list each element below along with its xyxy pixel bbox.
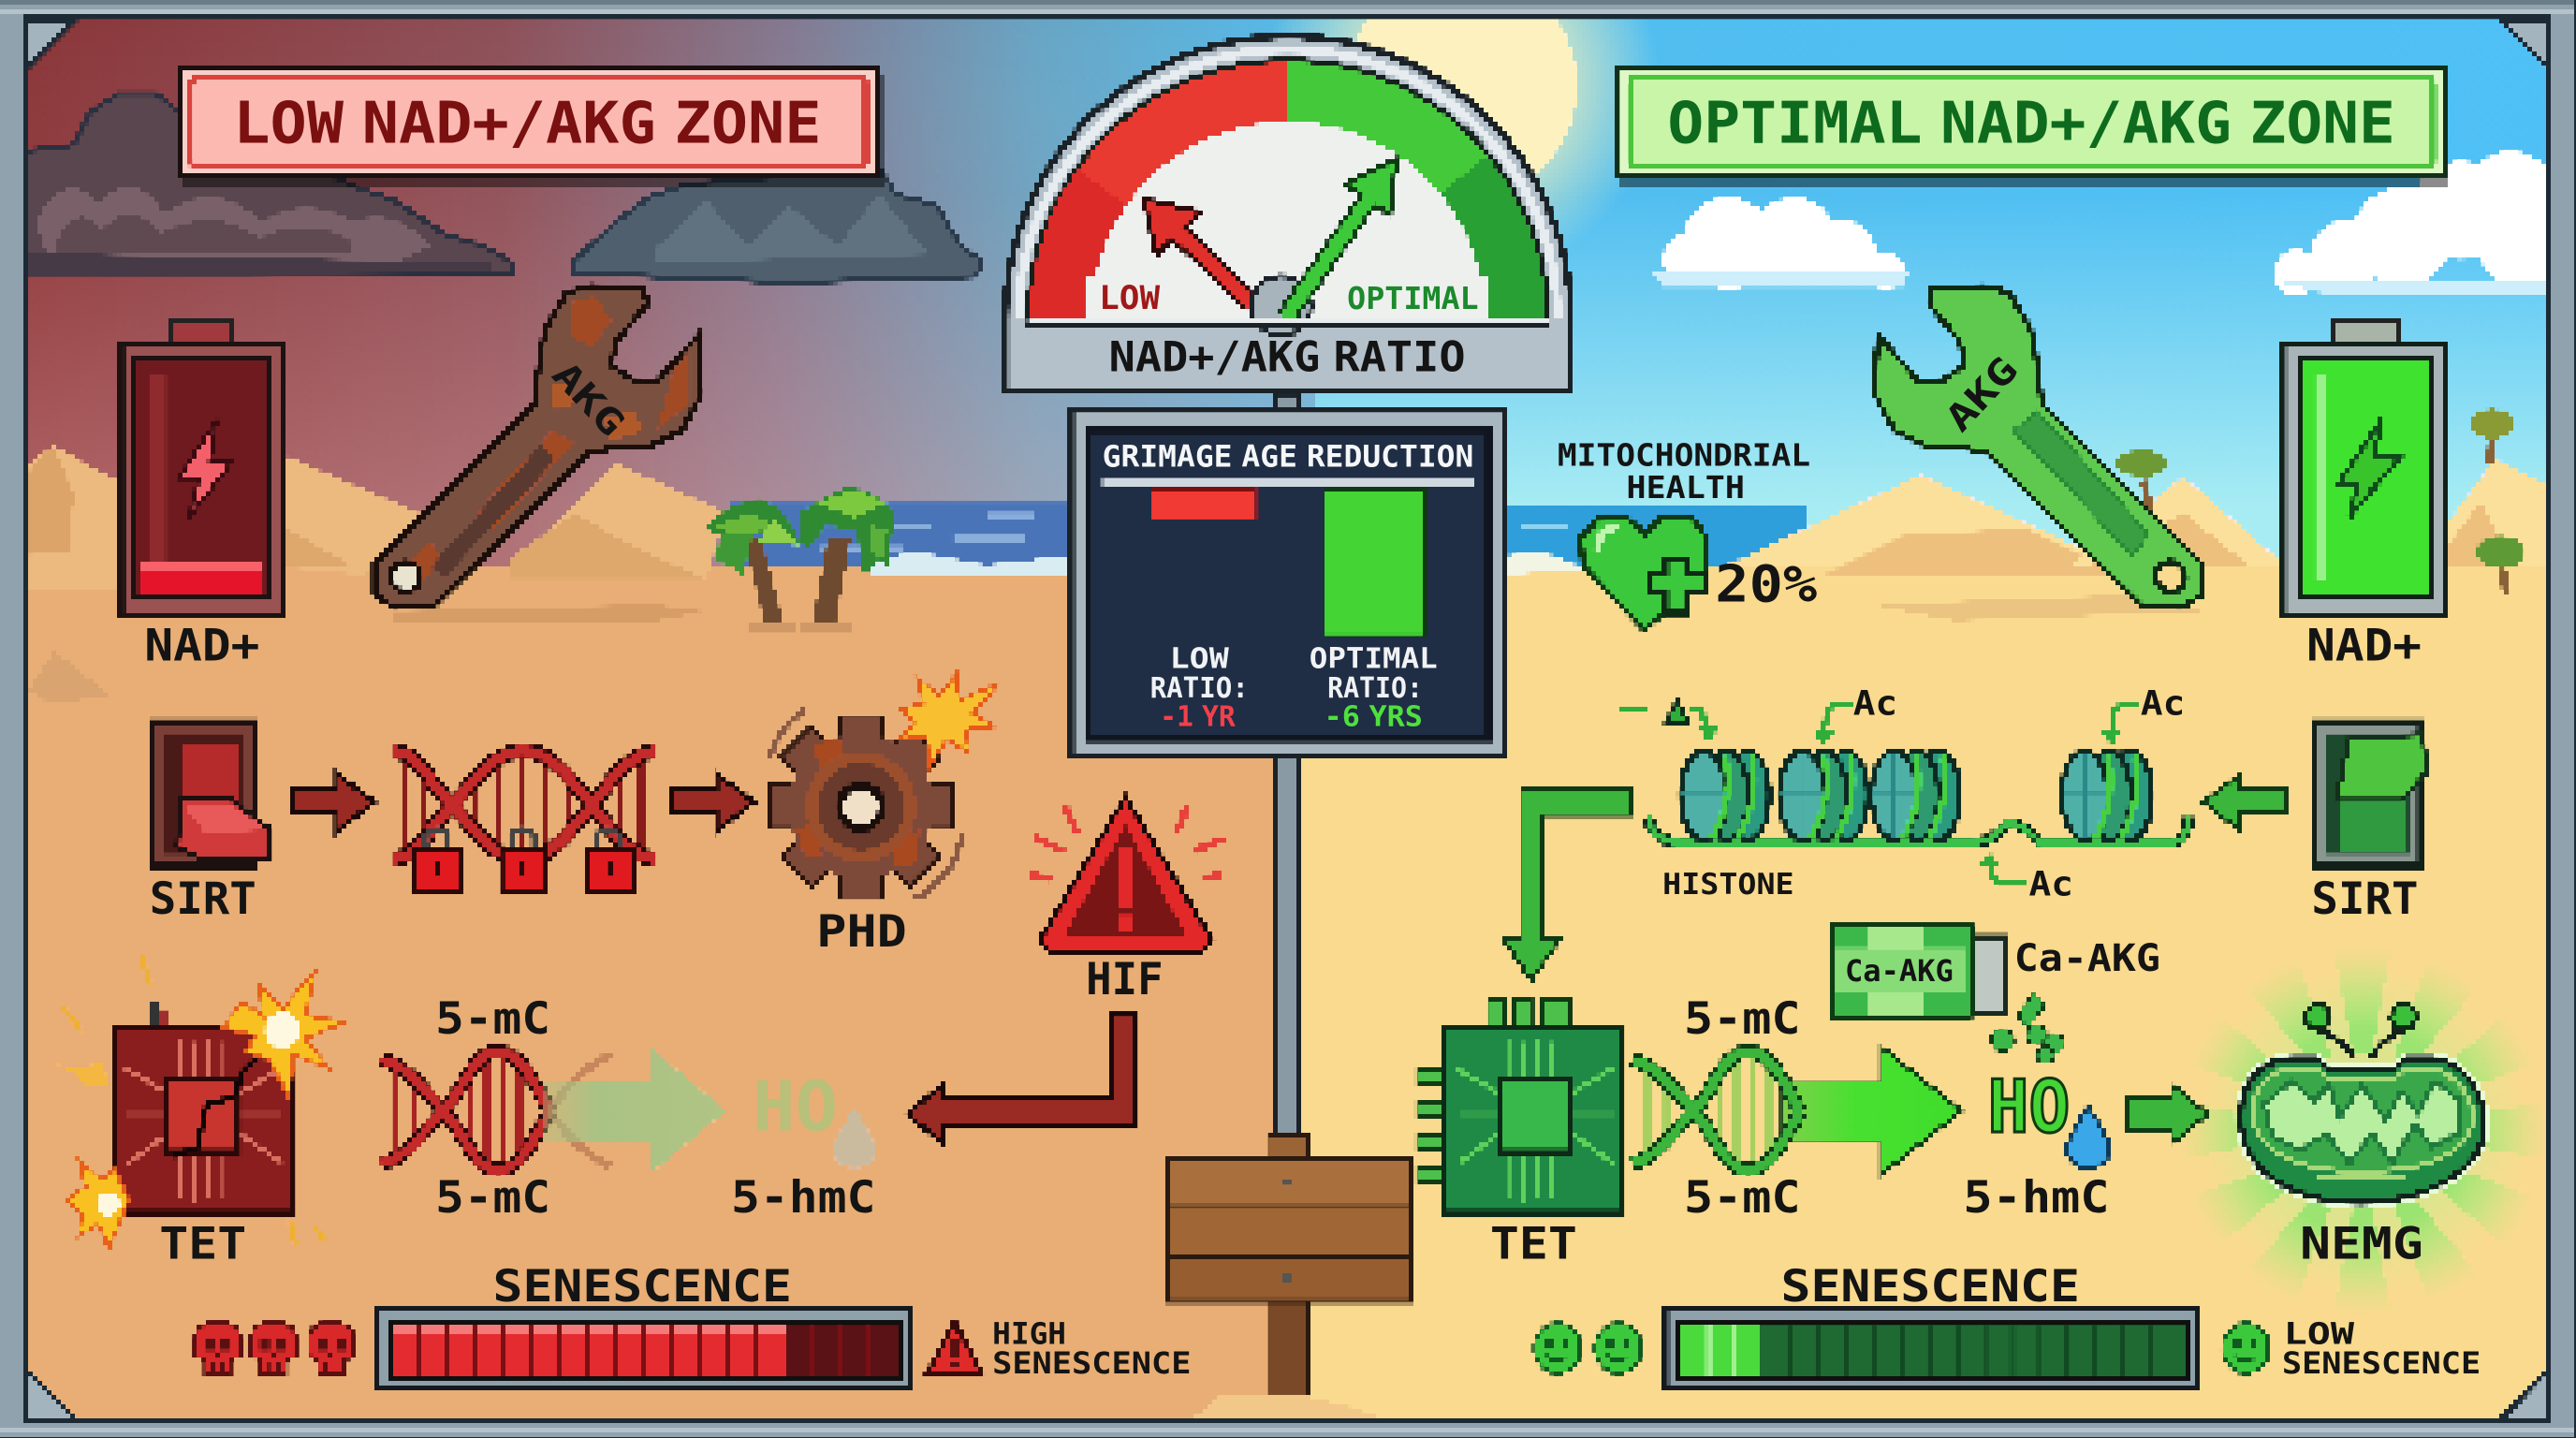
needle: optimal (green) [1251,159,1397,335]
single smile [2223,1324,2269,1372]
label: SIRT right: SIRT [2311,873,2419,925]
acetyl molecule and arrow [1618,700,1720,742]
wrench label: green: AKG [1938,349,2027,440]
label: Ca-AKG: Ca-AKG [2014,936,2160,980]
signpost [1166,394,1410,1419]
needle: low (red) [1144,198,1251,302]
arrow: DNA to PHD [670,774,754,831]
label: NAD+ right: NAD+ [2306,621,2422,672]
panel: GrimAge age reduction chart [1071,411,1505,756]
arrow: HIF to 5-hmC [907,1016,1137,1144]
nucleosome 4 [2062,751,2152,840]
icon: broken TET chip [115,1003,294,1212]
chart title: GRIMAGE AGE REDUCTION [1103,440,1473,474]
spark on gear [900,674,999,766]
Ac tag arrow 1 [1812,703,1852,746]
arrow: SIRT to histone [2203,774,2287,831]
palm fronds 2 [800,487,896,574]
ghost arrow: blocked conversion [542,1047,726,1175]
Ca-AKG particles [1991,992,2063,1064]
arrow: SIRT to DNA [291,774,374,831]
optimal ratio caption: -6 YRS [1325,701,1423,734]
bottle label: Ca-AKG [1845,955,1954,989]
heading text: optimal zone: OPTIMAL NAD+/AKG ZONE [1667,91,2395,157]
gauge dial face [1030,63,1546,318]
mitochondrial health stat [1558,437,1817,629]
icon: right DNA strand [1632,1051,1801,1170]
stat: 20%: 20% [1715,554,1817,613]
Ac tag 1: Ac [1853,682,1897,723]
ghost droplet [833,1108,875,1168]
Ac tag 2: Ac [2141,682,2185,723]
dark storm cloud, left [24,94,513,276]
label: 5-hmC left: 5-hmC [731,1172,875,1224]
label: SENESCENCE left: SENESCENCE [493,1261,792,1313]
nucleosome 1 [1680,751,1769,840]
skull icons [196,1323,353,1373]
label: SENESCENCE right: SENESCENCE [1781,1261,2080,1313]
optimal ratio caption: OPTIMAL [1310,642,1438,675]
low ratio caption: RATIO: [1150,672,1249,705]
label: OPTIMAL: OPTIMAL [1347,280,1479,316]
senescence meter: low [1534,1261,2481,1388]
gauge: NAD+/AKG ratio [1005,37,1571,391]
wooden plank sign [1166,1160,1410,1301]
label: LOW: LOW [1099,279,1161,317]
label: PHD: PHD [816,906,907,958]
ghost HO text: HO [753,1068,838,1148]
warning triangle [929,1323,981,1372]
low ratio caption [1150,642,1249,734]
caption: low senescence [2282,1318,2481,1381]
label: HISTONE: HISTONE [1662,868,1794,902]
label: TET right: TET [1490,1218,1577,1269]
text labels layer [144,349,2423,1269]
caption: low senescence: SENESCENCE [2282,1347,2481,1381]
icon: SIRT switch off (left) [151,721,271,866]
sparks on TET chip [56,956,345,1249]
bar: low ratio [1151,488,1255,520]
palm fronds 1 [703,498,800,579]
low ratio caption: -1 YR [1160,701,1236,734]
green progress bar [1666,1310,2198,1388]
droplet [2067,1106,2110,1168]
grey storm cloud, right of left banner [575,153,981,283]
padlocks [414,829,633,890]
nucleosome 3 [1871,751,1960,840]
Ac tag arrow 3 [1978,851,2027,884]
label: 5-mC bottom right: 5-mC [1684,1172,1801,1224]
label: SIRT left: SIRT [150,873,256,925]
left banner: low zone title [178,66,884,185]
arrow: 5-hmC to NEMG [2126,1084,2208,1144]
icon: green AKG wrench [1875,286,2202,608]
arrow: histone to TET [1503,790,1630,981]
optimal ratio caption: RATIO: [1327,672,1423,705]
icon: left DNA strand fading [381,1051,611,1170]
low ratio caption: LOW [1170,642,1229,675]
Ca-AKG supplement bottle [1832,923,2006,1019]
icon: locked DNA [391,751,657,890]
label: HIF: HIF [1086,954,1164,1005]
label: NAD+ left: NAD+ [144,621,259,672]
heading: mitochondrial health: MITOCHONDRIAL [1558,437,1810,474]
battery: low NAD+ [122,322,283,616]
right banner: optimal zone title [1617,66,2450,185]
left desert dunes [24,446,726,703]
label: NEMG: NEMG [2300,1218,2423,1269]
left palm trees [703,487,896,634]
label: NAD+/AKG RATIO: NAD+/AKG RATIO [1109,332,1466,382]
wrench label: rusty: AKG [544,354,633,445]
icon: rusty AKG wrench [374,286,701,608]
label: 5-mC top left: 5-mC [435,993,550,1045]
icon: rusty PHD gear [768,710,962,899]
right small palm trees [2116,409,2525,594]
white cloud 1, right sky [1653,198,1909,289]
red progress bar [378,1310,910,1388]
Ac tag 3: Ac [2029,864,2073,904]
Ac tag arrow 2 [2100,703,2139,746]
smile icons [1534,1324,1641,1372]
icon: green heart with plus [1580,518,1707,629]
big green conversion arrow [1782,1047,1962,1175]
senescence meter: high [196,1261,1191,1388]
heading text: low zone: LOW NAD+/AKG ZONE [233,91,822,157]
white cloud 2, right sky [2267,151,2565,296]
label: 5-hmC right: 5-hmC [1963,1172,2110,1224]
heading: mitochondrial health [1558,437,1810,506]
caption: high senescence: HIGH [992,1318,1066,1352]
nucleosome 2 [1779,751,1868,840]
HO text: HO [1988,1065,2070,1150]
label: TET left: TET [159,1218,246,1269]
icon: SIRT switch on (right) [2315,721,2426,866]
caption: high senescence [992,1318,1191,1381]
label: 5-mC bottom left: 5-mC [435,1172,550,1224]
icon: HIF warning triangle [1030,797,1224,951]
icon: glowing mitochondrion [2177,945,2548,1316]
bar: optimal ratio [1325,488,1425,636]
battery: high NAD+ [2284,322,2445,616]
heading: mitochondrial health: HEALTH [1627,469,1745,506]
caption: high senescence: SENESCENCE [992,1347,1191,1381]
label: 5-mC top right: 5-mC [1684,993,1801,1045]
icon: green TET chip [1418,999,1623,1212]
right desert dunes [1723,459,2550,621]
optimal ratio caption [1310,642,1438,734]
histone chain [1647,751,2188,843]
caption: low senescence: LOW [2284,1318,2355,1352]
